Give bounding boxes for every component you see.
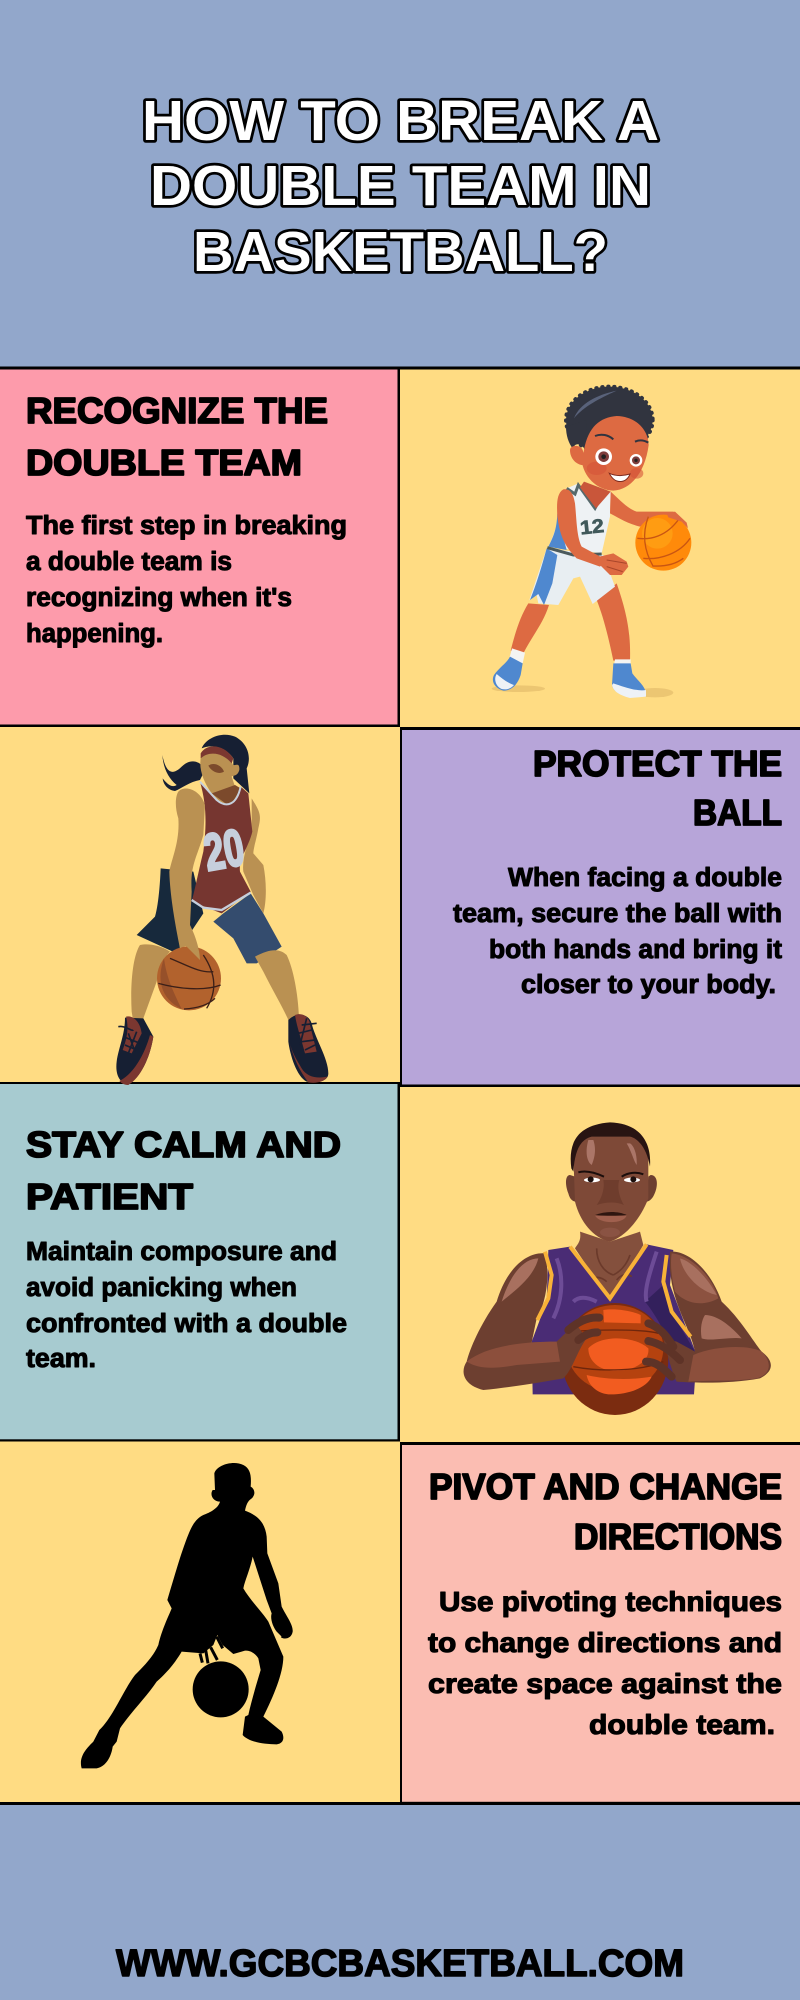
- body text: protect the ball: both hands and bring it: [489, 936, 783, 964]
- title: DOUBLE TEAM IN: [150, 154, 651, 218]
- heading: stay calm and patient: STAY CALM AND: [26, 1124, 341, 1165]
- title: [142, 89, 659, 284]
- panel: pivot and change directions: [402, 1445, 800, 1802]
- body text: pivot: Use pivoting techniques: [439, 1586, 782, 1617]
- panel: recognize the double team: [0, 370, 398, 724]
- panel: yellow background for silhouette illustration: [0, 1442, 400, 1802]
- body text: stay calm: [26, 1238, 347, 1373]
- body text: stay calm: avoid panicking when: [26, 1274, 297, 1302]
- heading: recognize the double team: DOUBLE TEAM: [26, 442, 302, 483]
- body text: protect the ball: [453, 864, 783, 999]
- illustration: man holding ball with purple jersey: [464, 1122, 771, 1415]
- heading: stay calm and patient: [26, 1124, 341, 1217]
- heading: pivot and change directions: PIVOT AND CHANGE: [429, 1466, 782, 1507]
- heading: pivot and change directions: [429, 1466, 782, 1557]
- body text: pivot: [428, 1586, 782, 1740]
- body text: recognize: recognizing when it's: [26, 584, 292, 612]
- panel: protect the ball: [402, 730, 800, 1084]
- title: BASKETBALL?: [193, 220, 608, 284]
- body text: stay calm: Maintain composure and: [26, 1238, 337, 1266]
- body text: recognize: [26, 512, 347, 648]
- footer website url: WWW.GCBCBASKETBALL.COM: [116, 1943, 684, 1985]
- heading: protect the ball: [533, 743, 782, 833]
- body text: pivot: to change directions and: [428, 1627, 782, 1658]
- body text: stay calm: team.: [26, 1345, 96, 1373]
- heading: recognize the double team: [26, 390, 328, 483]
- heading: recognize the double team: RECOGNIZE THE: [26, 390, 328, 431]
- illustration: woman dribbling with number 20 jersey: 20: [199, 818, 248, 882]
- body text: stay calm: confronted with a double: [26, 1310, 347, 1338]
- body text: pivot: create space against the: [428, 1668, 782, 1699]
- body text: pivot: double team.: [589, 1709, 775, 1740]
- illustration: boy dribbling orange ball: [492, 387, 691, 698]
- illustration: boy dribbling orange ball: 12: [579, 516, 605, 539]
- illustration: woman dribbling with number 20 jersey: [116, 735, 328, 1085]
- heading: protect the ball: BALL: [693, 792, 782, 833]
- body text: recognize: a double team is: [26, 548, 232, 576]
- title: HOW TO BREAK A: [142, 89, 659, 153]
- body text: recognize: happening.: [26, 620, 163, 648]
- body text: protect the ball: team, secure the ball with: [453, 900, 782, 928]
- body text: recognize: The first step in breaking: [26, 512, 347, 540]
- heading: stay calm and patient: PATIENT: [26, 1176, 193, 1217]
- body text: protect the ball: When facing a double: [508, 864, 782, 892]
- panel: yellow background for woman illustration: [0, 727, 400, 1082]
- panel: yellow background for man illustration: [400, 1087, 800, 1442]
- illustration: black silhouette of dribbling player: [81, 1463, 293, 1768]
- heading: pivot and change directions: DIRECTIONS: [574, 1516, 782, 1557]
- heading: protect the ball: PROTECT THE: [533, 743, 782, 784]
- panel: yellow background for boy illustration: [400, 370, 800, 727]
- body text: protect the ball: closer to your body.: [521, 971, 776, 999]
- panel: stay calm and patient: [0, 1084, 398, 1439]
